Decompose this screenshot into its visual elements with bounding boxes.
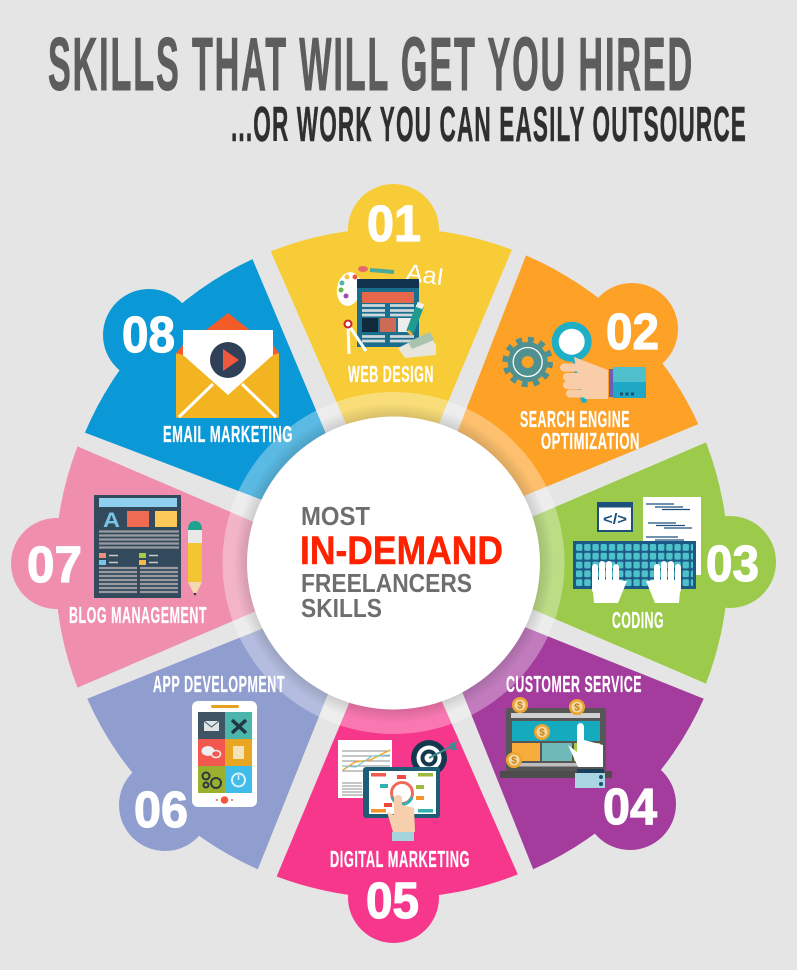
icon: smartphone <box>192 701 257 807</box>
label: search engine optimization: SEARCH ENGINE <box>520 406 630 432</box>
center text: freelancers: FREELANCERS <box>301 568 472 598</box>
number 01: 01 <box>367 195 421 252</box>
icon: laptop and coins: $ <box>517 700 523 712</box>
segment shape <box>406 572 720 885</box>
center text: skills: SKILLS <box>301 593 382 623</box>
icon: magnifier and gear <box>506 325 646 400</box>
segment shape <box>11 446 257 688</box>
icon: laptop and coins: $ <box>539 728 545 738</box>
segment shape <box>400 239 714 552</box>
center circle <box>247 416 540 710</box>
translucent ring <box>222 392 564 734</box>
number 08: 08 <box>122 306 175 363</box>
panel: 04 customer service <box>406 572 720 885</box>
label: blog management: BLOG MANAGEMENT <box>69 602 207 628</box>
label: coding: CODING <box>612 607 664 633</box>
icon: laptop and coins: $ <box>511 756 517 766</box>
icon: tablet, chart and target <box>338 740 458 841</box>
label: digital marketing: DIGITAL MARKETING <box>330 846 470 872</box>
segment shape <box>526 442 776 684</box>
segment shape <box>69 244 382 557</box>
center text: in-demand: IN-DEMAND <box>300 529 503 573</box>
label: app development: APP DEVELOPMENT <box>153 671 285 697</box>
center text: most: MOST <box>301 501 370 531</box>
panel: 08 email marketing <box>69 244 382 557</box>
icon: blog page and pencil <box>94 495 202 598</box>
label: search engine optimization: OPTIMIZATION <box>541 428 640 454</box>
label: email marketing: EMAIL MARKETING <box>163 421 293 447</box>
segment shape <box>275 695 518 943</box>
label: web design: WEB DESIGN <box>348 361 434 387</box>
segment shape <box>271 184 513 431</box>
number 07: 07 <box>27 536 82 593</box>
icon: web design <box>334 259 446 358</box>
number 05: 05 <box>366 872 419 929</box>
icon: laptop and coins <box>500 698 612 788</box>
label: customer service: CUSTOMER SERVICE <box>506 671 642 697</box>
panel: 06 app development <box>71 572 385 885</box>
panel: 05 digital marketing <box>275 695 518 943</box>
number 04: 04 <box>603 778 658 835</box>
panel: 02 search engine optimization <box>400 239 714 552</box>
number 03: 03 <box>706 535 759 592</box>
number 02: 02 <box>606 303 659 360</box>
number 06: 06 <box>134 781 188 838</box>
segment shape <box>71 572 385 885</box>
label: search engine optimization <box>520 406 640 454</box>
icon: blog page and pencil: A <box>103 509 120 532</box>
panel: 07 blog management <box>11 446 257 688</box>
icon: keyboard and code: </> <box>603 511 627 528</box>
icon: keyboard and code <box>573 497 701 603</box>
ring shadow <box>234 403 554 723</box>
panel: 01 web design <box>271 184 513 431</box>
panel: 03 coding <box>526 442 776 684</box>
icon: laptop and coins: $ <box>574 702 580 714</box>
icon: envelope with video <box>176 313 279 418</box>
icon: web design: AaI <box>404 259 446 291</box>
